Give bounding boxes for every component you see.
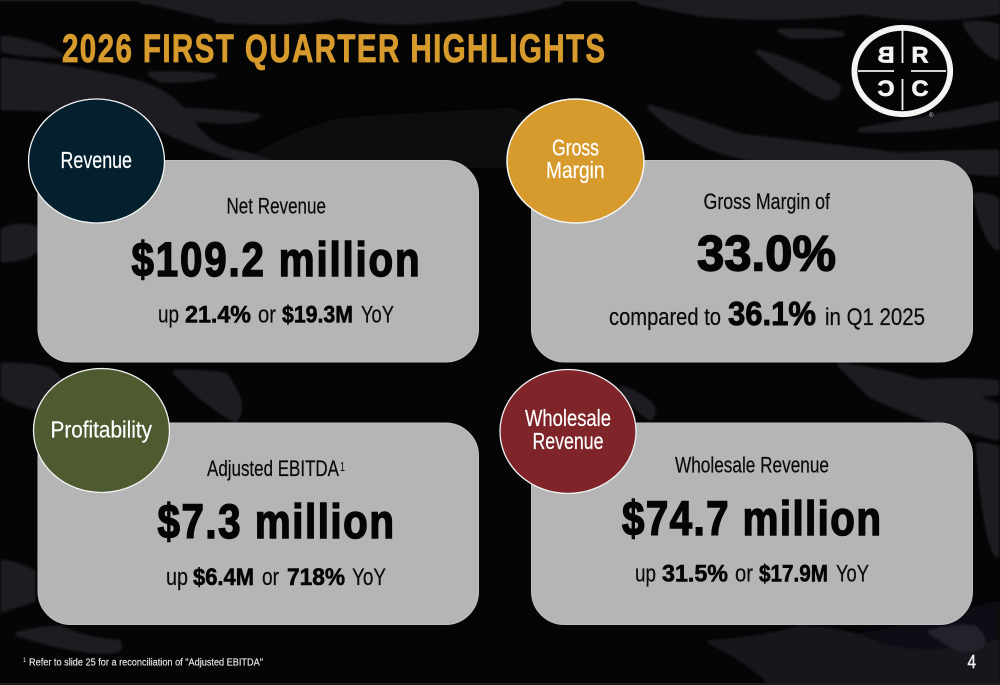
text: wholesale revenue change: 31.5% bbox=[662, 560, 728, 588]
badge: gross margin: Gross bbox=[552, 134, 599, 160]
text: wholesale revenue label: Wholesale Revenue bbox=[675, 452, 829, 478]
text: net revenue change: $19.3M bbox=[282, 302, 353, 328]
figure: wholesale revenue value: $74.7 million bbox=[622, 493, 881, 546]
icon: BRCC logo: C bbox=[912, 76, 929, 101]
icon: BRCC logo: C bbox=[877, 76, 894, 101]
badge: wholesale revenue: Wholesale bbox=[525, 405, 611, 431]
icon: BRCC logo: ® bbox=[929, 112, 934, 119]
text: adjusted EBITDA change: 718% bbox=[287, 564, 345, 591]
text: adjusted EBITDA change: YoY bbox=[352, 564, 386, 591]
text: net revenue change: or bbox=[258, 302, 276, 328]
text: net revenue change bbox=[158, 302, 394, 328]
text: net revenue change: 21.4% bbox=[185, 302, 251, 328]
text: adjusted EBITDA change bbox=[166, 564, 386, 591]
icon: BRCC logo: B bbox=[878, 42, 894, 68]
text: adjusted EBITDA change: $6.4M bbox=[193, 564, 254, 591]
badge: gross margin: Margin bbox=[546, 157, 604, 183]
text: wholesale revenue change bbox=[635, 560, 869, 588]
text: gross margin comparison bbox=[609, 296, 925, 333]
text: gross margin comparison: compared to bbox=[609, 304, 721, 331]
text: gross margin label: Gross Margin of bbox=[704, 189, 831, 214]
icon: BRCC logo bbox=[854, 28, 950, 119]
page number: 4 bbox=[968, 652, 976, 672]
panel: adjusted EBITDA bbox=[38, 423, 478, 624]
text: adjusted EBITDA change: up bbox=[166, 564, 188, 591]
badge: wholesale revenue: Revenue bbox=[532, 428, 604, 454]
text: net revenue change: up bbox=[158, 302, 179, 328]
text: wholesale revenue change: or bbox=[735, 560, 753, 588]
panel: gross margin bbox=[532, 160, 972, 362]
badge: revenue: Revenue bbox=[60, 147, 132, 173]
badge: gross margin bbox=[507, 99, 644, 223]
figure: net revenue value: $109.2 million bbox=[132, 234, 420, 287]
text: wholesale revenue change: YoY bbox=[836, 560, 869, 588]
text: wholesale revenue change: up bbox=[635, 560, 656, 588]
text: net revenue label: Net Revenue bbox=[226, 194, 326, 218]
footnote: Refer to slide 25 for a reconciliation of "Adjusted EBITDA" bbox=[29, 658, 263, 668]
title: 2026 FIRST QUARTER HIGHLIGHTS bbox=[62, 27, 605, 71]
badge: revenue bbox=[28, 99, 164, 223]
footnote: 1 bbox=[23, 658, 27, 664]
text: gross margin comparison: in Q1 2025 bbox=[825, 304, 925, 331]
badge: profitability: Profitability bbox=[50, 416, 152, 442]
text: adjusted EBITDA label: Adjusted EBITDA bbox=[207, 456, 339, 481]
text: adjusted EBITDA change: or bbox=[262, 564, 279, 591]
icon: BRCC logo: R bbox=[912, 42, 929, 68]
text: adjusted EBITDA label: 1 bbox=[340, 460, 345, 474]
panel: net revenue bbox=[38, 160, 478, 362]
text: gross margin comparison: 36.1% bbox=[728, 296, 816, 333]
panel: wholesale revenue bbox=[532, 423, 972, 624]
figure: adjusted EBITDA value: $7.3 million bbox=[158, 496, 394, 549]
badge: wholesale revenue bbox=[500, 370, 636, 494]
text: net revenue change: YoY bbox=[361, 302, 394, 328]
text: wholesale revenue change: $17.9M bbox=[759, 560, 828, 588]
badge: profitability bbox=[34, 368, 170, 492]
figure: gross margin value: 33.0% bbox=[697, 226, 836, 282]
